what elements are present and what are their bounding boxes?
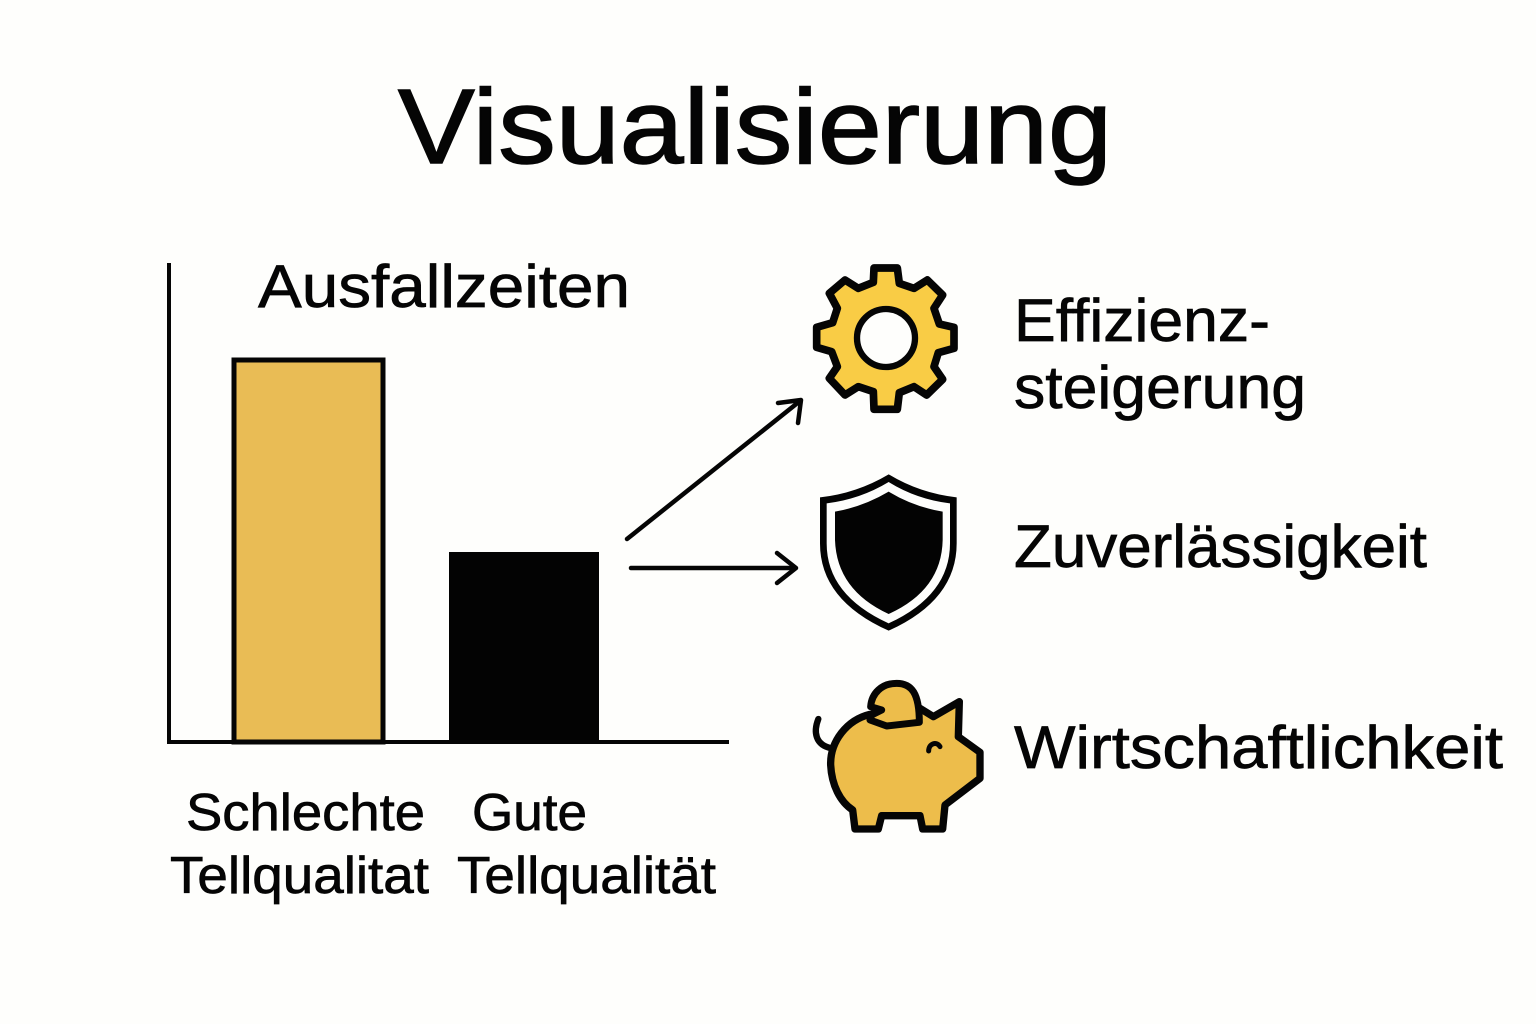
label: schlechte Teilqualität: Schlechte bbox=[186, 784, 425, 842]
label: gute Teilqualität: Gute bbox=[472, 784, 587, 842]
bar chart bbox=[169, 253, 729, 905]
title: Visualisierung bbox=[398, 68, 1112, 186]
label: schlechte Teilqualität: Tellqualitat bbox=[170, 847, 430, 905]
text: Effizienzsteigerung bbox=[1014, 287, 1306, 421]
arrow: up to efficiency bbox=[627, 400, 801, 539]
text: Zuverlässigkeit: Zuverlässigkeit bbox=[1014, 513, 1427, 580]
text: Effizienzsteigerung: Effizienz- bbox=[1014, 287, 1270, 354]
icon: piggy bank bbox=[816, 683, 980, 829]
arrow: right to reliability bbox=[631, 553, 796, 583]
text: Effizienzsteigerung: steigerung bbox=[1014, 354, 1306, 421]
label: gute Teilqualität bbox=[457, 784, 717, 905]
label: schlechte Teilqualität bbox=[170, 784, 430, 905]
icon: gear bbox=[817, 268, 954, 409]
text: Wirtschaftlichkeit: Wirtschaftlichkeit bbox=[1014, 714, 1503, 781]
bar: schlechte Teilqualität bbox=[234, 360, 383, 742]
icon: shield bbox=[820, 474, 957, 631]
bar: gute Teilqualität bbox=[449, 552, 599, 743]
chart axes bbox=[169, 263, 729, 742]
chart heading: Ausfallzeiten bbox=[258, 253, 630, 320]
label: gute Teilqualität: Tellqualität bbox=[457, 847, 717, 905]
